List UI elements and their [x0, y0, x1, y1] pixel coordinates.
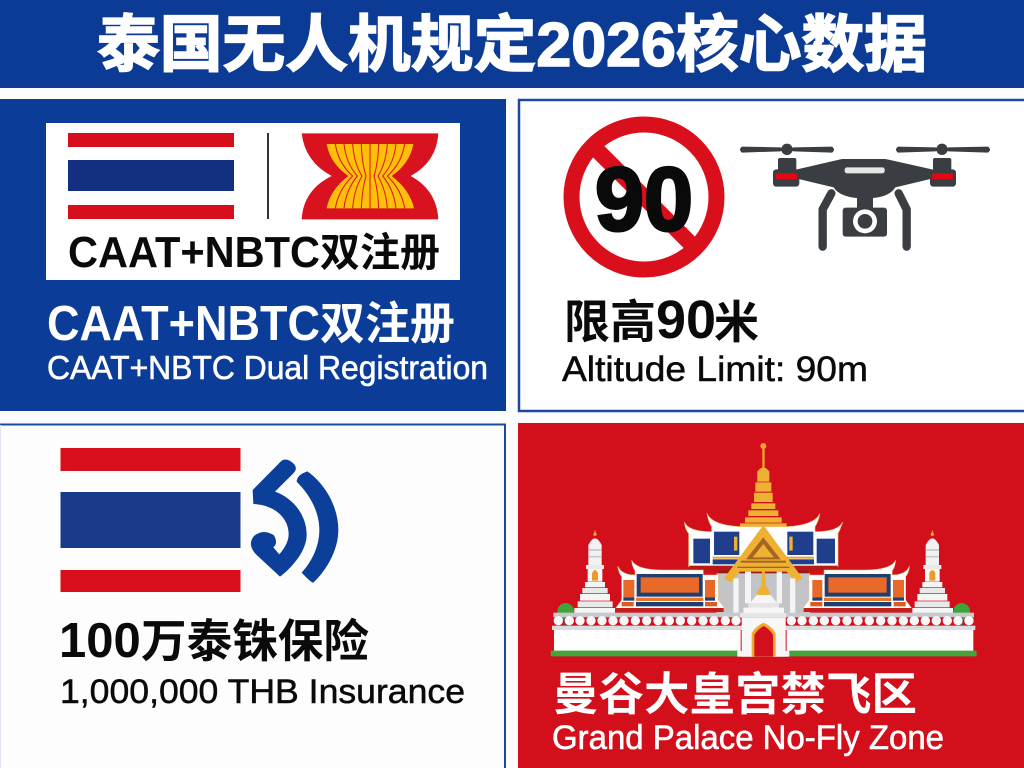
subheading: dual registration: CAAT+NBTC Dual Registration: [47, 349, 488, 386]
rear hall: [684, 513, 843, 574]
heading: no-fly zone: 曼谷大皇宫禁飞区: [553, 669, 917, 720]
card label: 双注册: [320, 231, 440, 275]
icon: 90 prohibition sign: 90: [595, 150, 693, 250]
heading: altitude limit: 限高: [564, 296, 656, 348]
tree: [557, 603, 574, 625]
icon: 90 prohibition sign: [572, 124, 716, 270]
grey courtyard: [717, 573, 810, 617]
heading: insurance: 100: [59, 614, 141, 668]
grey band behind balusters: [553, 613, 740, 617]
panel: altitude limit: [519, 100, 1024, 411]
central gate: [737, 595, 789, 657]
side hall: [615, 560, 725, 612]
heading: insurance: 万泰铢保险: [141, 616, 369, 667]
panel: no-fly zone: [518, 423, 1024, 768]
icon: insurance logo: [251, 459, 338, 583]
icon: ASEAN emblem: [302, 133, 438, 219]
subheading: insurance: 1,000,000 THB Insurance: [60, 673, 465, 711]
heading: dual registration: CAAT+NBTC: [47, 297, 320, 351]
panel: insurance: [0, 424, 505, 768]
card label: CAAT+NBTC: [68, 228, 320, 277]
title banner: [0, 0, 1024, 88]
wall: [551, 626, 742, 656]
heading: altitude limit: 米: [714, 297, 759, 348]
portico columns: [733, 572, 795, 617]
logo card: [46, 123, 460, 280]
panel: dual registration: [0, 99, 506, 411]
title banner: 泰国无人机规定2026核心数据: [97, 11, 927, 80]
central spire: [737, 443, 789, 553]
heading: dual registration: 双注册: [320, 298, 455, 349]
subheading: altitude limit: Altitude Limit: 90m: [562, 350, 868, 389]
gold gable: [724, 525, 803, 583]
icon: Thai flag: [68, 133, 234, 219]
left side structures: [551, 529, 742, 656]
subheading: no-fly zone: Grand Palace No-Fly Zone: [552, 719, 944, 757]
icon: Thai flag: [60, 448, 240, 592]
icon: drone: [740, 144, 990, 247]
right side structures: [785, 529, 977, 656]
heading: altitude limit: 90: [656, 290, 716, 350]
chedi tower: [574, 529, 615, 615]
baluster row: [554, 616, 741, 625]
icon: Grand Palace: [551, 443, 977, 657]
